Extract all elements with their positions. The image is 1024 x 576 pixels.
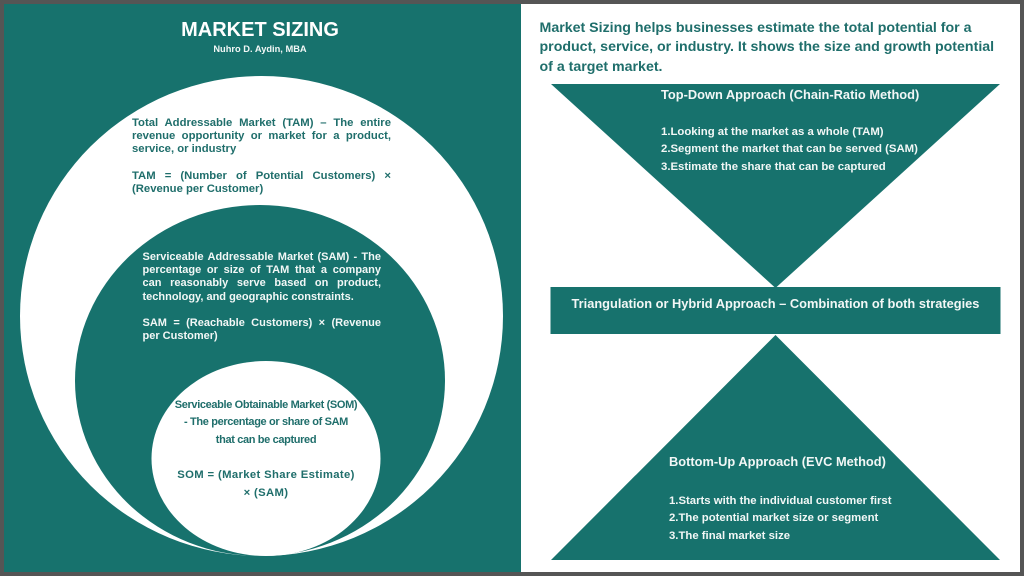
- heading: bottom-up approach: Bottom-Up Approach (EVC Method): [669, 454, 886, 468]
- text: TAM definition: Total Addressable Market (TAM) – The entire revenue opportunity or market for a product, service, or industry: [132, 116, 391, 155]
- list: top-down steps: 1.Looking at the market as a whole (TAM): [661, 126, 884, 138]
- text: SOM formula: [177, 469, 355, 499]
- text: SOM definition: that can be captured: [216, 434, 316, 446]
- list: top-down steps: 3.Estimate the share that can be captured: [661, 161, 886, 173]
- text: SAM definition: Serviceable Addressable Market (SAM) - The percentage or size of TAM that a company can reasonably serve based on product, technology, and geographic constraints.: [142, 250, 381, 303]
- list: bottom-up steps: 2.The potential market size or segment: [669, 512, 878, 524]
- text: SOM formula: SOM = (Market Share Estimate): [177, 469, 355, 481]
- list: bottom-up steps: [669, 494, 892, 542]
- panel: right white background: [521, 4, 1020, 572]
- text: intro paragraph: of a target market.: [540, 59, 662, 75]
- panel: left teal background: [4, 4, 521, 572]
- list: top-down steps: 2.Segment the market that can be served (SAM): [661, 143, 918, 155]
- text: hybrid approach: Triangulation or Hybrid Approach – Combination of both strategies: [572, 296, 979, 311]
- list: top-down steps: [661, 126, 918, 173]
- list: bottom-up steps: 3.The final market size: [669, 530, 790, 542]
- author: Nuhro D. Aydin, MBA: [213, 44, 307, 54]
- text: TAM formula: TAM = (Number of Potential Customers) × (Revenue per Customer): [132, 170, 391, 195]
- text: intro paragraph: product, service, or industry. It shows the size and growth potential: [540, 39, 994, 55]
- text: SAM formula: SAM = (Reachable Customers) × (Revenue per Customer): [142, 317, 381, 342]
- text: SOM formula: × (SAM): [244, 487, 288, 499]
- text: SOM definition: Serviceable Obtainable Market (SOM): [175, 398, 357, 410]
- text: SOM definition: - The percentage or share of SAM: [184, 416, 348, 428]
- heading: top-down approach: Top-Down Approach (Chain-Ratio Method): [661, 87, 919, 102]
- list: bottom-up steps: 1.Starts with the individual customer first: [669, 494, 892, 506]
- text: SOM definition: [175, 398, 357, 446]
- text: intro paragraph: Market Sizing helps businesses estimate the total potential for a: [540, 20, 972, 36]
- text: intro paragraph: [540, 20, 994, 75]
- title: MARKET SIZING: [181, 19, 339, 41]
